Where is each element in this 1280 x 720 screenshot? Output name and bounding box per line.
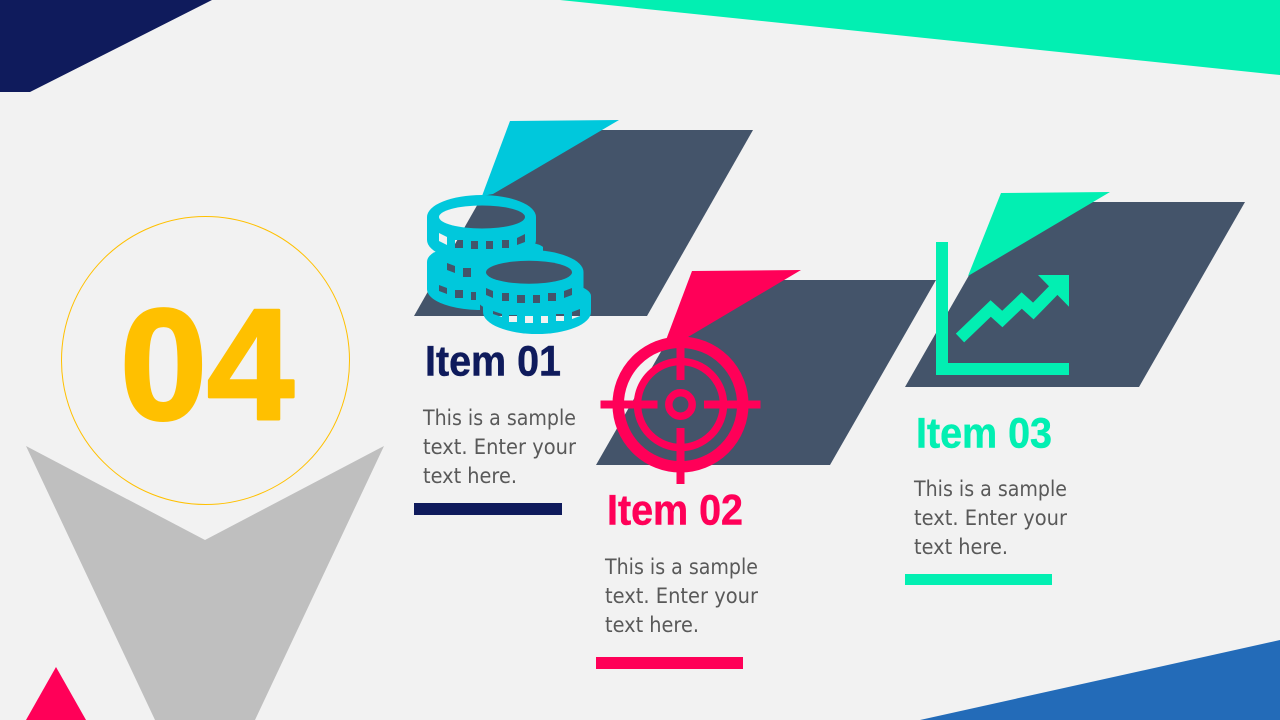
icon: target xyxy=(600,338,760,484)
bottom-right corner shape xyxy=(920,640,1280,720)
text block: item 02: text here. xyxy=(605,613,699,638)
panel: item 02 xyxy=(596,270,936,669)
heading: item 01: Item 01 xyxy=(425,338,561,386)
section number: 04 xyxy=(120,277,294,453)
bottom-left pink triangle xyxy=(26,667,86,720)
underline bar 01 xyxy=(414,503,562,515)
slate parallelogram 02 xyxy=(596,280,936,465)
text block: item 01: text here. xyxy=(423,464,517,489)
heading: item 03: Item 03 xyxy=(916,410,1052,458)
slate parallelogram 03 xyxy=(905,202,1245,387)
text block: item 03 xyxy=(913,477,1067,560)
text block: item 03: text here. xyxy=(914,535,1008,560)
icon: growth chart xyxy=(936,242,1069,375)
circle outline xyxy=(62,216,350,504)
underline bar 02 xyxy=(596,657,743,669)
panel: item 03 xyxy=(905,192,1245,585)
top-left corner shape xyxy=(0,0,212,92)
text block: item 02: text. Enter your xyxy=(605,584,758,609)
pink flag xyxy=(666,270,801,340)
text block: item 03: This is a sample xyxy=(913,477,1067,502)
text block: item 01: text. Enter your xyxy=(423,435,576,460)
panel: item 01 xyxy=(414,120,753,515)
text block: item 01: This is a sample xyxy=(422,406,576,431)
text block: item 02 xyxy=(604,555,758,638)
green flag xyxy=(968,192,1110,276)
icon: coins xyxy=(427,195,591,334)
text block: item 01 xyxy=(422,406,576,489)
text block: item 02: This is a sample xyxy=(604,555,758,580)
cyan flag xyxy=(482,120,619,196)
heading: item 02: Item 02 xyxy=(607,488,743,534)
text block: item 03: text. Enter your xyxy=(914,506,1067,531)
slate parallelogram 01 xyxy=(414,130,753,316)
underline bar 03 xyxy=(905,574,1052,585)
gray chevron arrow xyxy=(26,446,384,720)
top-right corner shape xyxy=(560,0,1280,75)
